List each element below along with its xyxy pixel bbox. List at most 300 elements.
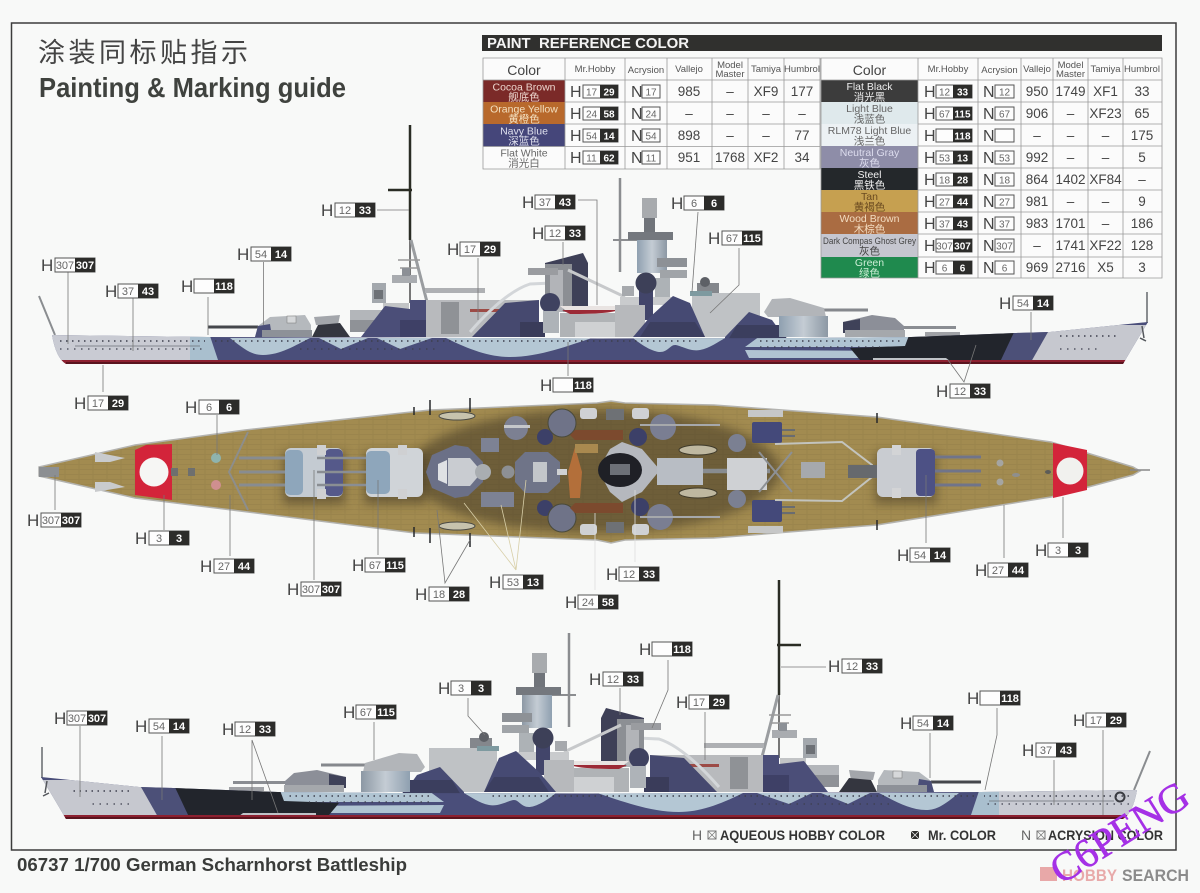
row 7: N xyxy=(983,216,995,233)
callout H118: H xyxy=(639,640,651,659)
callout H53/13: 53 xyxy=(507,577,519,589)
row 8: 128 xyxy=(1131,238,1153,253)
row 1: 17 xyxy=(586,88,597,98)
row 3: 118 xyxy=(954,132,971,142)
callout H54/14 bow xyxy=(999,294,1053,340)
callout H37/43 funnel: 43 xyxy=(559,197,571,209)
callouts: deck view xyxy=(27,398,1088,612)
row 4: H xyxy=(570,150,582,167)
callout H307/307 bow: H xyxy=(27,511,39,530)
callout H6/6: H xyxy=(671,194,683,213)
callout H24/58: 58 xyxy=(602,597,614,609)
callout H17/29 boot: H xyxy=(74,394,86,413)
product caption: 06737 1/700 German Scharnhorst Battleship xyxy=(17,855,407,875)
callout H27/44: 44 xyxy=(238,561,251,573)
row 2 xyxy=(924,106,1150,123)
callout H54/14: 14 xyxy=(275,249,288,261)
callout H307/307: 307 xyxy=(68,713,86,725)
row 2: – xyxy=(685,106,693,121)
callout H54/14: 14 xyxy=(937,718,950,730)
legend xyxy=(692,827,1163,843)
right table: Steel xyxy=(858,169,881,181)
callout H17/29: 17 xyxy=(693,697,705,709)
table heading bar: PAINT REFERENCE COLOR xyxy=(487,36,690,52)
callout H12/33 hull xyxy=(936,345,990,401)
panel: paint reference table xyxy=(482,35,1162,280)
row 3: 77 xyxy=(794,128,810,143)
row 6: 27 xyxy=(939,198,950,208)
right table: Master xyxy=(1056,69,1085,80)
row 1 xyxy=(924,84,1150,101)
row 4: 13 xyxy=(957,154,968,164)
callout H17/29: 29 xyxy=(713,697,725,709)
left table: 黄橙色 xyxy=(508,112,540,126)
right table: Tan xyxy=(861,191,878,203)
callout H3/3: 3 xyxy=(1075,545,1081,557)
watermark: C6PENG xyxy=(1041,772,1197,893)
callout H54/14 bow: H xyxy=(999,294,1011,313)
callout H54/14: 54 xyxy=(914,550,926,562)
row 4 xyxy=(924,150,1146,167)
callout H37/43: H xyxy=(1022,741,1034,760)
row 3: – xyxy=(1033,128,1041,143)
row 3: 54 xyxy=(645,132,657,142)
callout H307/307 bow xyxy=(27,475,81,530)
row 2: 24 xyxy=(586,110,597,120)
right table: Wood Brown xyxy=(840,213,900,225)
row 8: 307 xyxy=(936,242,953,252)
callout H12/33 main mast: 12 xyxy=(339,205,351,217)
fore superstructure xyxy=(727,410,877,533)
callout H307/307 stern: 307 xyxy=(76,260,94,272)
right table: 黄褐色 xyxy=(854,200,886,214)
callout H27/44 xyxy=(975,505,1028,580)
callout H3/3 xyxy=(135,495,189,548)
callout H17/29: 17 xyxy=(1090,715,1102,727)
row 6: – xyxy=(1102,194,1110,209)
row 7 xyxy=(924,216,1153,233)
row 2: 115 xyxy=(954,110,971,120)
row 2: XF23 xyxy=(1089,106,1122,121)
left table xyxy=(483,58,820,170)
row 4: – xyxy=(1102,150,1110,165)
callout H12/33 funnel xyxy=(589,670,643,715)
callout H6/6 xyxy=(185,398,239,455)
row 3: – xyxy=(1067,128,1075,143)
callout H67/115: 67 xyxy=(369,560,381,572)
callout H3/3: H xyxy=(1035,541,1047,560)
right table: 灰色 xyxy=(859,244,880,258)
callout H307/307: 307 xyxy=(322,584,340,596)
callout H54/14: H xyxy=(135,717,147,736)
callout H18/28: 18 xyxy=(433,589,445,601)
title: English: Painting & Marking guide xyxy=(39,72,346,103)
callout H12/33 main mast: 33 xyxy=(359,205,371,217)
left table: 消光白 xyxy=(508,156,540,170)
row 2: H xyxy=(570,106,582,123)
legend: Mr. COLOR xyxy=(928,827,996,843)
callout H6/6: 6 xyxy=(206,402,212,414)
callout H17/29 boot: 17 xyxy=(92,398,104,410)
row 3: – xyxy=(726,128,734,143)
source logo: SEARCH xyxy=(1122,866,1189,885)
left table: Vallejo xyxy=(675,64,703,75)
right table: 绿色 xyxy=(859,266,880,280)
source logo: HOBBY xyxy=(1062,866,1118,885)
callout H53/13: H xyxy=(489,573,501,592)
callout H12/33 funnel cap: H xyxy=(532,224,544,243)
right table: Flat Black xyxy=(846,81,893,93)
callout H54/14: 54 xyxy=(917,718,929,730)
legend: ACRYSION COLOR xyxy=(1048,827,1163,843)
row 2: 58 xyxy=(603,110,615,120)
callout H12/33 hull: H xyxy=(936,382,948,401)
callout H53/13: 13 xyxy=(527,577,539,589)
row 9 xyxy=(924,260,1146,277)
bottom ship side profile (mirrored) xyxy=(29,580,1150,825)
callout H27/44: H xyxy=(200,557,212,576)
callout H307/307 xyxy=(54,709,107,797)
row 5 xyxy=(924,172,1146,189)
right table: 木棕色 xyxy=(854,222,886,236)
row 1: 1749 xyxy=(1055,84,1086,99)
callout H18/28: H xyxy=(415,585,427,604)
row 6: N xyxy=(983,194,995,211)
callout H54/14 bow: 54 xyxy=(1017,298,1029,310)
deck plan view xyxy=(39,398,1150,547)
callout H53/13 xyxy=(464,480,543,592)
row 2: 65 xyxy=(1134,106,1150,121)
aft superstructure and secondary armament xyxy=(426,408,649,535)
row 6: – xyxy=(1067,194,1075,209)
callout H12/33 mast: 33 xyxy=(866,661,878,673)
callout H307/307: 307 xyxy=(88,713,106,725)
row 3: 898 xyxy=(678,128,700,143)
row 6: 9 xyxy=(1138,194,1146,209)
callout H3/3: 3 xyxy=(1055,545,1061,557)
left table: Acrysion xyxy=(628,65,664,76)
row 8: XF22 xyxy=(1089,238,1122,253)
table heading bar xyxy=(482,35,1162,52)
callout H6/6: 6 xyxy=(226,402,232,414)
row 1: N xyxy=(631,84,643,101)
callout H12/33 mast: 12 xyxy=(846,661,858,673)
callout H12/33 xyxy=(222,720,278,813)
row 2: 67 xyxy=(999,110,1010,120)
callout H54/14: 14 xyxy=(173,721,186,733)
row 5: N xyxy=(983,172,995,189)
legend: AQUEOUS HOBBY COLOR xyxy=(720,827,885,843)
right table: Humbrol xyxy=(1124,64,1160,75)
callout H37/43: H xyxy=(105,282,117,301)
callout H12/33 funnel cap xyxy=(532,224,585,265)
national marking bands xyxy=(135,443,1087,500)
row 4: 11 xyxy=(586,154,597,164)
row 9: 2716 xyxy=(1055,260,1086,275)
right table: Model xyxy=(1058,60,1083,71)
right table: 消光黑 xyxy=(854,90,885,104)
right table: Color xyxy=(853,62,887,78)
row 3: – xyxy=(1102,128,1110,143)
callouts: bottom ship xyxy=(54,640,1126,815)
row 3: H xyxy=(570,128,582,145)
callout H12/33 main mast: H xyxy=(321,201,333,220)
right table: 灰色 xyxy=(859,156,880,170)
callout H27/44: 27 xyxy=(218,561,230,573)
row 1: 29 xyxy=(603,88,615,98)
callout H12/33 funnel cap: 12 xyxy=(549,228,561,240)
row 7: 37 xyxy=(939,220,950,230)
row 7: 1701 xyxy=(1055,216,1086,231)
callout H3/3: 3 xyxy=(458,683,464,695)
row 4: – xyxy=(1067,150,1075,165)
callout H17/29: H xyxy=(676,693,688,712)
title xyxy=(38,38,346,103)
title: Chinese: 涂装同标贴指示 xyxy=(38,38,252,68)
right table: Neutral Gray xyxy=(840,147,900,159)
callout H12/33: 33 xyxy=(643,569,655,581)
row 5: 18 xyxy=(939,176,950,186)
callout H118 stern: H xyxy=(967,689,979,708)
callout H12/33: 12 xyxy=(623,569,635,581)
funnel xyxy=(528,253,625,333)
boat and midship block xyxy=(560,306,635,337)
callout H67/115 xyxy=(352,480,405,575)
row 4: XF2 xyxy=(754,150,778,165)
row 9: X5 xyxy=(1097,260,1114,275)
left table: 深蓝色 xyxy=(508,134,540,148)
left table: Cocoa Brown xyxy=(492,82,556,94)
callout H307/307 bow: 307 xyxy=(62,515,80,527)
row 2: 67 xyxy=(939,110,950,120)
row 8: H xyxy=(924,238,936,255)
callout H24/58: H xyxy=(565,593,577,612)
callout H12/33: 33 xyxy=(259,724,271,736)
row 9: 969 xyxy=(1026,260,1048,275)
callout H307/307: H xyxy=(54,709,66,728)
flagstaffs and mast xyxy=(39,125,1147,335)
callout H54/14: 14 xyxy=(934,550,947,562)
callout H54/14 xyxy=(135,717,189,800)
deck outline xyxy=(39,401,1140,543)
callout H67/115: H xyxy=(352,556,364,575)
left table: Master xyxy=(715,69,745,80)
callout H37/43: 37 xyxy=(1040,745,1052,757)
callout H6/6: 6 xyxy=(711,198,717,210)
row 3: H xyxy=(924,128,936,145)
row 7: 43 xyxy=(957,220,968,230)
callout H67/115: 67 xyxy=(726,233,738,245)
row 1: 12 xyxy=(999,88,1010,98)
callout H6/6: 6 xyxy=(691,198,697,210)
right table: 浅蓝色 xyxy=(854,112,886,126)
row 5: – xyxy=(1138,172,1146,187)
left table: Navy Blue xyxy=(500,126,548,138)
callout H37/43: 43 xyxy=(142,286,154,298)
bow and stern fittings xyxy=(39,432,1150,510)
row 4: 34 xyxy=(794,150,810,165)
row 7: – xyxy=(1102,216,1110,231)
callout H17/29 xyxy=(1073,711,1126,815)
row 7: 37 xyxy=(999,220,1010,230)
row 4: 53 xyxy=(999,154,1010,164)
row 6: 981 xyxy=(1026,194,1048,209)
row 9: 6 xyxy=(1002,264,1008,274)
callout H12/33 funnel cap: 33 xyxy=(569,228,581,240)
right table: Vallejo xyxy=(1023,64,1051,75)
deck edge masts and booms xyxy=(414,398,877,547)
row 6: 44 xyxy=(957,198,968,208)
row 9: 3 xyxy=(1138,260,1146,275)
callout H118 midship: 118 xyxy=(574,380,592,392)
callout H118 xyxy=(181,277,234,335)
callout H118: 118 xyxy=(215,281,233,293)
callout H54/14: 54 xyxy=(255,249,267,261)
callout H307/307: H xyxy=(287,580,299,599)
row 7: H xyxy=(924,216,936,233)
callout H67/115: 67 xyxy=(360,707,372,719)
callout H17/29 xyxy=(676,693,729,760)
callout H54/14 bow: 14 xyxy=(1037,298,1050,310)
callout H12/33 hull: 33 xyxy=(974,386,986,398)
row 1: H xyxy=(924,84,936,101)
callout H18/28: 28 xyxy=(453,589,465,601)
callout H12/33: 12 xyxy=(239,724,251,736)
row 2: – xyxy=(726,106,734,121)
row 2 xyxy=(570,106,806,123)
callout H27/44: 44 xyxy=(1012,565,1025,577)
row 4: N xyxy=(631,150,643,167)
bridge tower xyxy=(615,198,790,345)
row 1: 985 xyxy=(678,84,700,99)
right table: Dark Compas Ghost Grey xyxy=(823,236,916,247)
callout H17/29: 29 xyxy=(484,244,496,256)
left table: Orange Yellow xyxy=(490,104,558,116)
source logo xyxy=(1040,866,1189,885)
row 1: 177 xyxy=(791,84,813,99)
row 4: 951 xyxy=(678,150,700,165)
row 3: 175 xyxy=(1131,128,1153,143)
callout H307/307 xyxy=(287,470,341,599)
callout H12/33 xyxy=(606,490,659,584)
callout H54/14 xyxy=(897,475,950,565)
callout H118: H xyxy=(181,277,193,296)
row 4: 5 xyxy=(1138,150,1146,165)
row 5: 1402 xyxy=(1055,172,1086,187)
row 8: – xyxy=(1033,238,1041,253)
row 4: 62 xyxy=(603,154,615,164)
callout H54/14: H xyxy=(897,546,909,565)
row 2: 24 xyxy=(645,110,657,120)
callout H54/14: 54 xyxy=(153,721,165,733)
callout H307/307 bow: 307 xyxy=(42,515,60,527)
row 2: N xyxy=(631,106,643,123)
aft turrets xyxy=(239,445,423,499)
icon: stern crest on bottom ship xyxy=(1116,792,1124,802)
callout H37/43 xyxy=(105,282,158,351)
right table xyxy=(821,58,1162,280)
callout H118 stern xyxy=(967,689,1020,790)
row 8: N xyxy=(983,238,995,255)
callout H27/44 xyxy=(200,495,254,576)
boats xyxy=(568,430,717,513)
row 1: XF1 xyxy=(1093,84,1118,99)
callout H12/33 mast xyxy=(781,657,882,676)
callout H67/115: 115 xyxy=(743,233,761,245)
callout H17/29: 17 xyxy=(464,244,476,256)
row 1: 950 xyxy=(1026,84,1048,99)
row 9: N xyxy=(983,260,995,277)
callout H6/6: H xyxy=(185,398,197,417)
left table: Mr.Hobby xyxy=(575,64,616,75)
callout H27/44: H xyxy=(975,561,987,580)
callout H118 midship xyxy=(540,342,593,395)
row 3: 14 xyxy=(603,132,615,142)
row 2: – xyxy=(762,106,770,121)
callout H3/3: H xyxy=(438,679,450,698)
row 4: 11 xyxy=(646,154,657,164)
row 7: 983 xyxy=(1026,216,1048,231)
callout H6/6 xyxy=(671,194,724,292)
row 3: – xyxy=(762,128,770,143)
row 3 xyxy=(924,128,1153,145)
callout H12/33 funnel: 33 xyxy=(627,674,639,686)
row 3: N xyxy=(631,128,643,145)
row 2: 906 xyxy=(1026,106,1048,121)
callout H12/33 mast: H xyxy=(828,657,840,676)
callout H307/307 stern: H xyxy=(41,256,53,275)
row 1: 33 xyxy=(957,88,968,98)
row 2: – xyxy=(1067,106,1075,121)
callout H18/28 xyxy=(415,510,470,604)
callout H67/115: H xyxy=(708,229,720,248)
right table: Acrysion xyxy=(981,65,1018,76)
row 5: H xyxy=(924,172,936,189)
callout H54/14: H xyxy=(237,245,249,264)
row 6: 27 xyxy=(999,198,1010,208)
row 6 xyxy=(924,194,1146,211)
callout H37/43: 37 xyxy=(122,286,134,298)
right table: Mr.Hobby xyxy=(928,64,969,75)
fore turret xyxy=(877,445,981,498)
callout H24/58: 24 xyxy=(582,597,594,609)
row 4: 992 xyxy=(1026,150,1048,165)
callout H3/3 xyxy=(438,679,491,735)
row 9: 6 xyxy=(960,264,966,274)
right table: Tamiya xyxy=(1090,64,1121,75)
left table: Color xyxy=(507,62,541,78)
callout H3/3: 3 xyxy=(478,683,484,695)
callout H37/43 xyxy=(1022,741,1076,805)
right table: 浅兰色 xyxy=(854,134,886,148)
row 8: 307 xyxy=(954,242,971,252)
left table: 舰底色 xyxy=(508,90,540,104)
row 1: H xyxy=(570,84,582,101)
row 9: 6 xyxy=(942,264,948,274)
row 8 xyxy=(924,238,1153,255)
callout H37/43 funnel: H xyxy=(522,193,534,212)
callout H24/58 xyxy=(565,513,618,612)
left table: Humbrol xyxy=(784,64,820,75)
row 3: N xyxy=(983,128,995,145)
callout H3/3: 3 xyxy=(176,533,182,545)
callout H118 midship: H xyxy=(540,376,552,395)
callout H3/3: H xyxy=(135,529,147,548)
callout H54/14 xyxy=(237,245,291,325)
row 5: 864 xyxy=(1026,172,1049,187)
left table: Model xyxy=(717,60,743,71)
callout H12/33: H xyxy=(222,720,234,739)
